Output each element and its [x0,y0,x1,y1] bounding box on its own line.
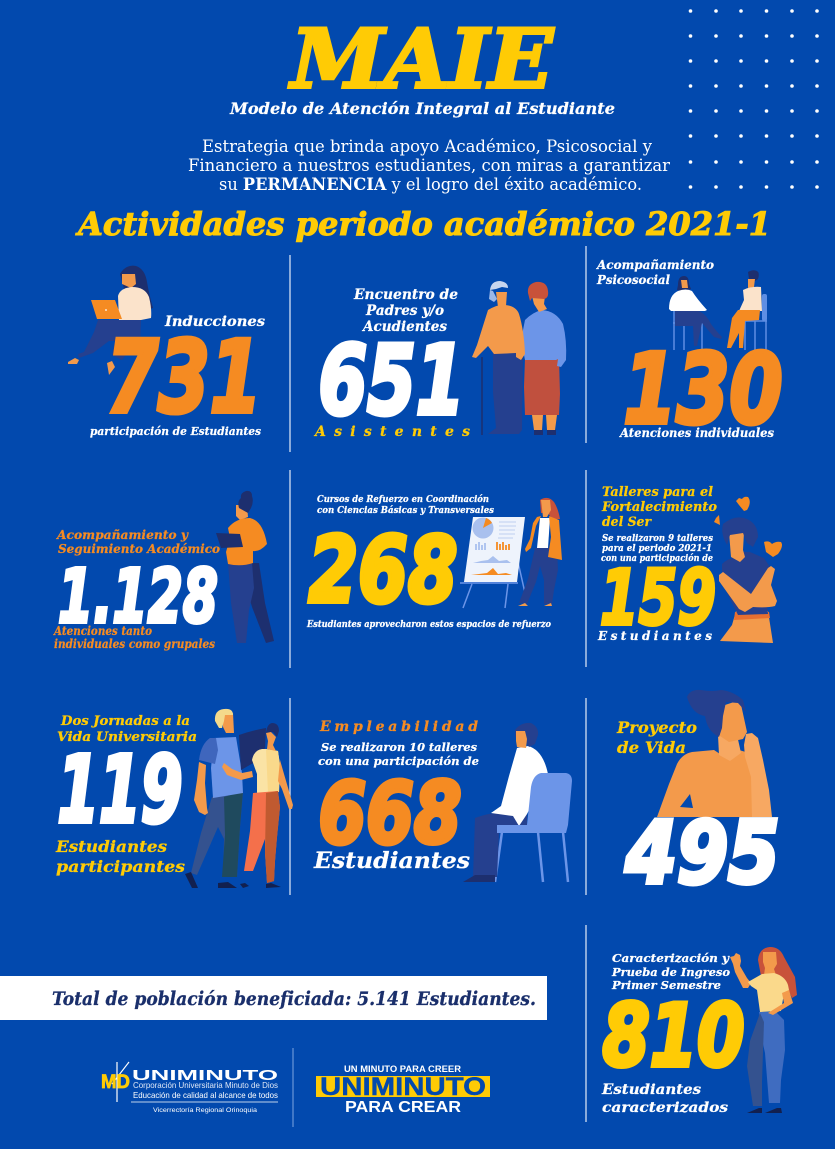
heading: Dos Jornadas a la [60,714,190,729]
caption: Asistentes [313,424,470,440]
number: 495 [625,804,780,904]
number: 130 [624,334,782,446]
heading [56,527,220,556]
heading [57,714,197,745]
icon: woman with hearts [714,497,782,643]
heading: Acompañamiento y [56,527,189,542]
heading: Encuentro de [353,287,458,303]
number: 731 [106,320,262,436]
heading: con Ciencias Básicas y Transversales [317,505,495,516]
caption: caracterizados [602,1100,728,1116]
caption [53,624,215,651]
heading: Acudientes [361,319,447,335]
logo: UNIMINUTO corporate: Corporación Universitaria Minuto de Dios [133,1080,278,1090]
caption: Estudiantes [597,629,712,643]
heading [601,485,717,530]
icon: elderly couple [472,281,566,435]
caption: Estudiantes [55,837,167,856]
icon: waving woman [730,947,797,1113]
logo: UNIMINUTO corporate [101,1062,278,1114]
caption: individuales como grupales [54,637,215,651]
description: para el periodo 2021-1 [602,543,712,554]
description [318,740,479,768]
banner: total beneficiaries [0,976,547,1020]
panel: empleabilidad [313,719,572,882]
logo: UNIMINUTO para crear [316,1064,490,1116]
caption: Estudiantes [313,848,470,874]
panel: talleres del ser [597,485,782,643]
heading: Talleres para el [602,485,713,500]
number: 159 [600,554,716,642]
caption: Atenciones individuales [619,425,774,440]
logo: UNIMINUTO para crear: UNIMINUTO [320,1073,486,1101]
heading: Vida Universitaria [57,730,197,745]
logo: UNIMINUTO para crear: PARA CREAR [345,1099,461,1116]
panel: jornadas vida universitaria [55,709,293,888]
heading [611,951,730,992]
intro paragraph [188,137,671,195]
heading: de Vida [617,738,686,757]
icon: man seated on chair [463,723,572,882]
icon: thoughtful woman [657,690,772,817]
heading: Seguimiento Académico [58,541,220,556]
caption: participantes [56,857,185,876]
panel: seguimiento académico [53,491,274,651]
description [601,533,714,564]
logo: UNIMINUTO para crear: UN MINUTO PARA CREER [344,1064,461,1075]
caption [55,837,185,876]
caption: participación de Estudiantes [90,424,261,438]
description: con una participación de [318,754,479,768]
caption [601,1082,728,1116]
intro paragraph: Estrategia que brinda apoyo Académico, Psicosocial y [202,137,652,157]
icon: counselling session [669,270,767,350]
description: Se realizaron 9 talleres [602,533,714,544]
heading [317,494,495,516]
number: 119 [58,736,182,844]
heading [353,287,458,335]
banner: total beneficiaries: Total de población beneficiada: 5.141 Estudiantes. [52,988,536,1010]
heading [596,258,714,287]
section heading: Actividades periodo académico 2021-1 [75,205,771,243]
heading: Cursos de Refuerzo en Coordinación [317,494,489,505]
label: Inducciones [164,314,265,330]
number: 651 [318,326,464,436]
panel: inducciones [68,266,265,438]
title: MAIE [288,12,554,108]
heading: Fortalecimiento [601,500,717,515]
heading: del Ser [602,515,652,530]
caption: Atenciones tanto [53,624,152,638]
icon: woman with tablet [216,491,274,643]
caption: Estudiantes [601,1082,701,1098]
heading: Empleabilidad [319,719,478,735]
icon: walking couple [185,709,293,888]
description: con una participación de [601,553,713,564]
heading: Caracterización y [612,951,730,965]
heading: Primer Semestre [611,978,721,992]
panel: caracterización [601,947,797,1116]
heading: Psicosocial [596,273,670,287]
number: 268 [308,518,458,624]
logo: UNIMINUTO corporate: Educación de calidad al alcance de todos [133,1090,278,1100]
icon: woman with laptop [68,266,153,375]
intro paragraph: Financiero a nuestros estudiantes, con miras a garantizar [188,156,671,176]
subtitle: Modelo de Atención Integral al Estudiante [229,99,615,118]
panel: proyecto de vida [616,690,780,904]
icon: presenter with chart board [460,498,562,608]
panel: acompañamiento psicosocial [596,258,782,446]
panel: cursos de refuerzo [306,494,562,630]
description: Se realizaron 10 talleres [321,740,478,754]
intro paragraph: su PERMANENCIA y el logro del éxito académico. [219,175,642,195]
panel: encuentro de padres [313,281,566,440]
number: 668 [318,764,462,864]
heading: Acompañamiento [596,258,714,272]
logo: UNIMINUTO corporate: UNIMINUTO [132,1068,278,1084]
heading [616,718,697,757]
number: 1.128 [58,554,218,640]
heading: Prueba de Ingreso [611,965,730,979]
logo: UNIMINUTO corporate: MD [101,1072,130,1093]
heading: Padres y/o [365,303,444,319]
caption: Estudiantes aprovecharon estos espacios de refuerzo [306,619,552,630]
logo: UNIMINUTO corporate: Vicerrectoría Regional Orinoquia [153,1107,257,1114]
heading: Proyecto [616,718,697,737]
number: 810 [602,986,744,1086]
